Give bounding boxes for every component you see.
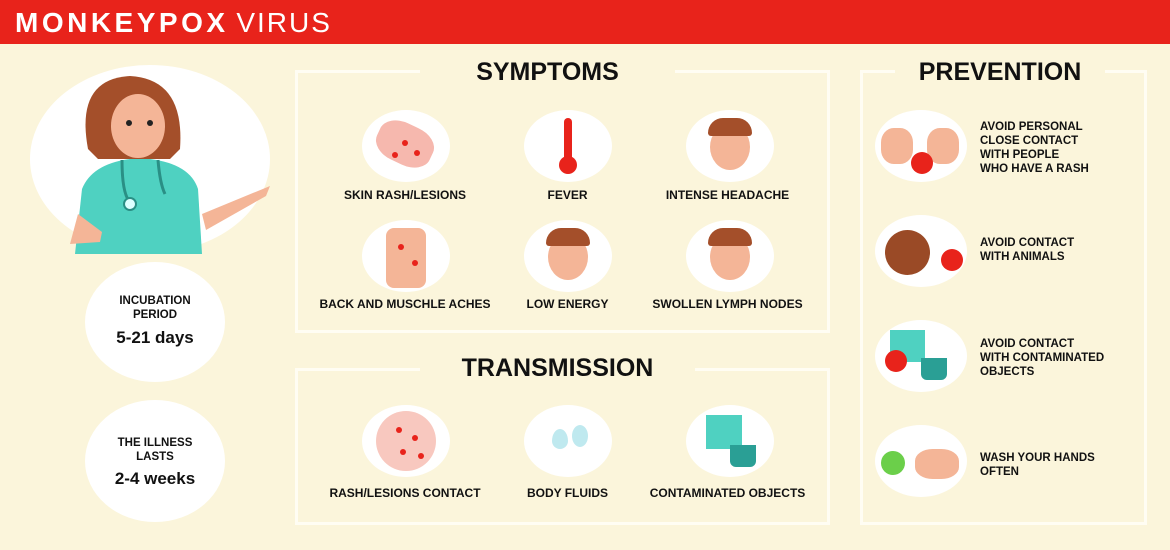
prevention texts: WHO HAVE A RASH [980,163,1089,175]
header bar [0,0,1170,44]
prevention texts: AVOID PERSONAL [980,121,1083,133]
prevention texts [980,121,1104,478]
prevention texts: WITH ANIMALS [980,251,1065,263]
heading: transmission [420,354,695,383]
icon: nurse [30,65,270,254]
prevention texts: AVOID CONTACT [980,237,1074,249]
panel: prevention [860,70,1147,525]
heading: symptoms: SYMPTOMS [476,58,619,86]
prevention texts: OBJECTS [980,366,1034,378]
prevention icons [875,110,967,497]
title: MONKEYPOX VIRUS [15,7,332,38]
prevention texts: CLOSE CONTACT [980,135,1078,147]
symptom icons [362,110,774,292]
symptom labels [319,188,803,311]
prevention texts: WITH PEOPLE [980,149,1059,161]
symptom labels: BACK AND MUSCHLE ACHES [319,297,491,311]
prevention texts: WASH YOUR HANDS [980,452,1095,464]
illness circle: THE ILLNESS [118,437,192,449]
illness circle [85,400,225,522]
symptom labels: INTENSE HEADACHE [666,188,789,202]
incubation circle: 5-21 days [116,328,194,347]
panel: transmission [295,368,830,525]
incubation circle: PERIOD [133,309,177,321]
incubation circle [85,262,225,382]
heading: symptoms [420,58,675,87]
transmission labels [329,486,805,500]
symptom labels: FEVER [547,188,588,202]
heading: transmission: TRANSMISSION [462,354,653,382]
symptom labels: SKIN RASH/LESIONS [344,188,466,202]
prevention texts: WITH CONTAMINATED [980,352,1104,364]
transmission labels: BODY FLUIDS [527,486,608,500]
heading: prevention: PREVENTION [919,58,1081,86]
transmission icons [362,405,774,477]
symptom labels: SWOLLEN LYMPH NODES [652,297,803,311]
transmission labels: CONTAMINATED OBJECTS [650,486,805,500]
prevention texts: OFTEN [980,466,1019,478]
illness circle: LASTS [136,451,174,463]
panel: symptoms [295,70,830,333]
illness circle: 2-4 weeks [115,469,195,488]
prevention texts: AVOID CONTACT [980,338,1074,350]
incubation circle: INCUBATION [119,295,191,307]
transmission labels: RASH/LESIONS CONTACT [329,486,481,500]
symptom labels: LOW ENERGY [526,297,608,311]
